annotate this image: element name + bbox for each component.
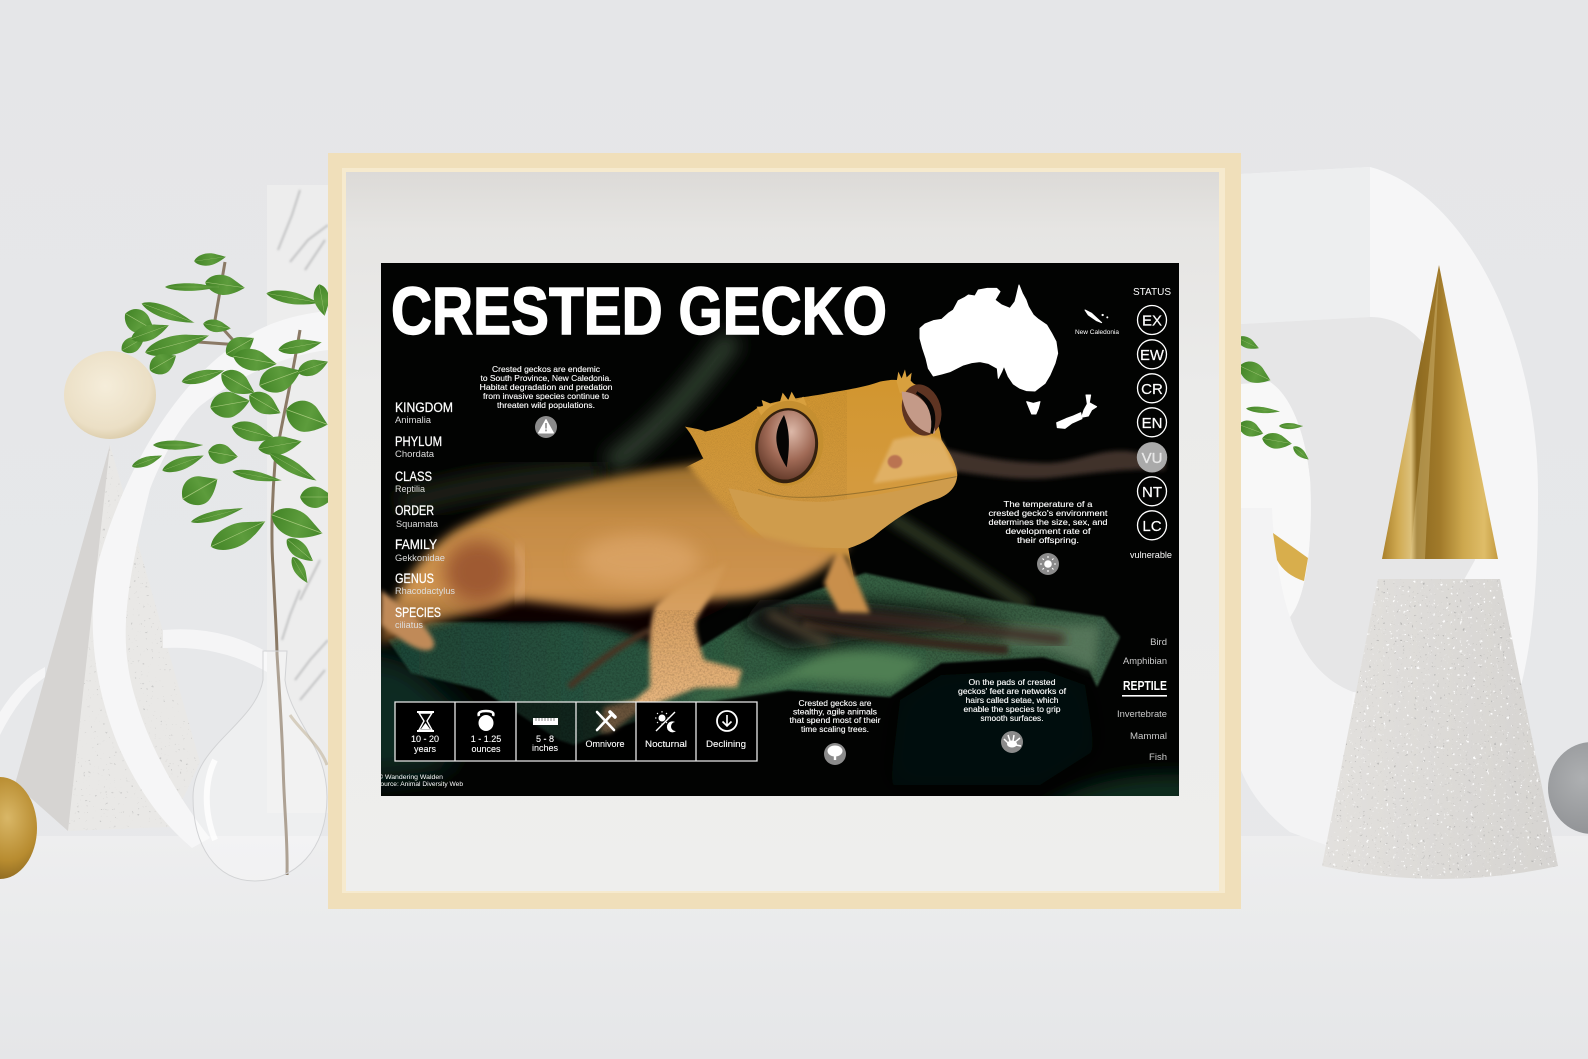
title: CRESTED GECKO — [391, 274, 887, 349]
taxonomy list — [395, 400, 455, 630]
text block: temperature: The temperature of a — [1004, 500, 1093, 509]
animal class list: Bird — [1150, 637, 1167, 648]
icon: ruler — [533, 718, 558, 725]
text block: threats: Habitat degradation and predation — [480, 383, 612, 392]
stat labels: Nocturnal — [645, 739, 687, 749]
stat labels: ounces — [471, 744, 501, 754]
text block: temperature — [988, 500, 1108, 545]
icon: tree — [824, 743, 846, 765]
left eye — [751, 392, 824, 486]
conservation status scale: VU — [1142, 450, 1162, 467]
taxonomy list: Squamata — [396, 519, 438, 529]
gold cone — [1382, 265, 1498, 559]
conservation status scale: EN — [1142, 415, 1162, 432]
stat labels: Declining — [706, 739, 746, 749]
conservation status scale: EW — [1140, 347, 1165, 364]
text block: temperature: development rate of — [1006, 527, 1091, 536]
white arch sculpture right — [1241, 167, 1538, 850]
animal class list: Mammal — [1130, 731, 1167, 742]
stat labels: 10 - 20 — [411, 734, 439, 744]
taxonomy list: CLASS — [395, 469, 432, 484]
map: Australia and New Zealand — [920, 285, 1108, 428]
right eye — [896, 370, 942, 436]
text block: agile climbers: that spend most of their — [790, 716, 881, 725]
white arcs and tubes left — [0, 311, 328, 848]
conservation status scale: EX — [1142, 312, 1162, 330]
icon: warning — [535, 416, 557, 438]
photo: gecko head (close-up) — [673, 369, 957, 593]
conservation status scale: STATUS — [1133, 286, 1171, 298]
photo: tail — [945, 449, 1165, 479]
icon: gecko foot — [1001, 731, 1023, 753]
taxonomy list: Rhacodactylus — [395, 586, 455, 596]
credits: © Wandering Walden — [378, 773, 443, 781]
stat labels: Omnivore — [585, 739, 625, 749]
text block: temperature: determines the size, sex, and — [988, 518, 1108, 527]
text block: threats: Crested geckos are endemic — [492, 365, 600, 374]
photo: dark shadows and streaks on leaf — [430, 585, 1064, 687]
text block: agile climbers: Crested geckos are — [798, 699, 872, 708]
taxonomy list: KINGDOM — [395, 400, 453, 415]
icon: kettlebell — [478, 711, 494, 731]
text block: threats: threaten wild populations. — [497, 401, 595, 410]
taxonomy list: Chordata — [395, 449, 434, 459]
photo: leaf — [388, 573, 1123, 748]
taxonomy list: ciliatus — [395, 620, 424, 630]
animal class list: Amphibian — [1123, 656, 1167, 667]
animal class list: Fish — [1149, 752, 1167, 763]
text block: setae: On the pads of crested — [968, 678, 1056, 687]
taxonomy list: Gekkonidae — [395, 553, 445, 563]
photo: gecko front leg — [600, 563, 745, 735]
conservation status scale — [1130, 286, 1172, 561]
text block: temperature: their offspring. — [1017, 536, 1079, 545]
taxonomy list: Reptilia — [395, 484, 425, 494]
stat labels: 1 - 1.25 — [471, 734, 501, 744]
text block: setae: hairs called setae, which — [966, 696, 1058, 705]
wooden sphere — [64, 351, 156, 439]
conservation status scale: vulnerable — [1130, 550, 1172, 561]
text block: agile climbers: stealthy, agile animals — [793, 708, 877, 716]
text block: setae: geckos' feet are networks of — [958, 687, 1067, 696]
marble column — [267, 185, 331, 813]
picture frame — [328, 153, 1241, 909]
map label: New Caledonia: New Caledonia — [1075, 329, 1119, 336]
taxonomy list: ORDER — [395, 503, 434, 518]
text block: threats: from invasive species continue to — [483, 392, 610, 401]
conservation status scale: NT — [1142, 484, 1162, 501]
credits: Source: Animal Diversity Web — [376, 781, 463, 788]
text block: temperature: crested gecko's environment — [988, 509, 1108, 518]
gold sphere — [0, 777, 37, 879]
speckled concrete cone — [1322, 579, 1558, 884]
text block: setae: enable the species to grip — [964, 705, 1061, 714]
text block: agile climbers — [790, 699, 881, 734]
icon: sun — [1037, 553, 1059, 575]
credits — [381, 774, 463, 788]
animal class list: REPTILE — [1123, 679, 1167, 693]
infographic poster — [360, 263, 1190, 815]
taxonomy list: SPECIES — [395, 605, 441, 620]
taxonomy list: FAMILY — [395, 537, 437, 552]
conservation status scale: LC — [1142, 518, 1162, 535]
stat labels: 5 - 8 — [536, 734, 554, 744]
animal class list: Invertebrate — [1117, 709, 1167, 720]
stats strip — [395, 702, 757, 761]
concrete pyramid — [15, 445, 205, 835]
taxonomy list: Animalia — [395, 415, 431, 425]
right plant leaves — [1235, 333, 1311, 462]
stat labels — [411, 734, 746, 754]
taxonomy list: GENUS — [395, 571, 434, 586]
stat labels: years — [414, 744, 436, 754]
text block: threats — [480, 365, 612, 410]
taxonomy list: PHYLUM — [395, 434, 442, 449]
text block: agile climbers: time scaling trees. — [801, 725, 869, 734]
plant stem — [170, 262, 300, 875]
text block: setae: smooth surfaces. — [980, 714, 1044, 723]
icon: declining arrow — [717, 711, 737, 731]
glass vase — [193, 651, 327, 881]
conservation status scale: CR — [1141, 381, 1163, 398]
photo: gecko body — [381, 463, 870, 650]
text block: setae — [958, 678, 1067, 723]
text block: threats: to South Province, New Caledonia. — [480, 374, 612, 383]
animal class list — [1117, 637, 1167, 763]
icon: nocturnal — [655, 711, 676, 732]
icon: hourglass — [417, 711, 434, 732]
icon: fork and knife — [597, 712, 615, 730]
stat labels: inches — [532, 743, 559, 753]
photo: blurred background foliage — [360, 337, 1190, 815]
plant foliage — [118, 251, 334, 586]
grey stone — [1548, 742, 1588, 834]
